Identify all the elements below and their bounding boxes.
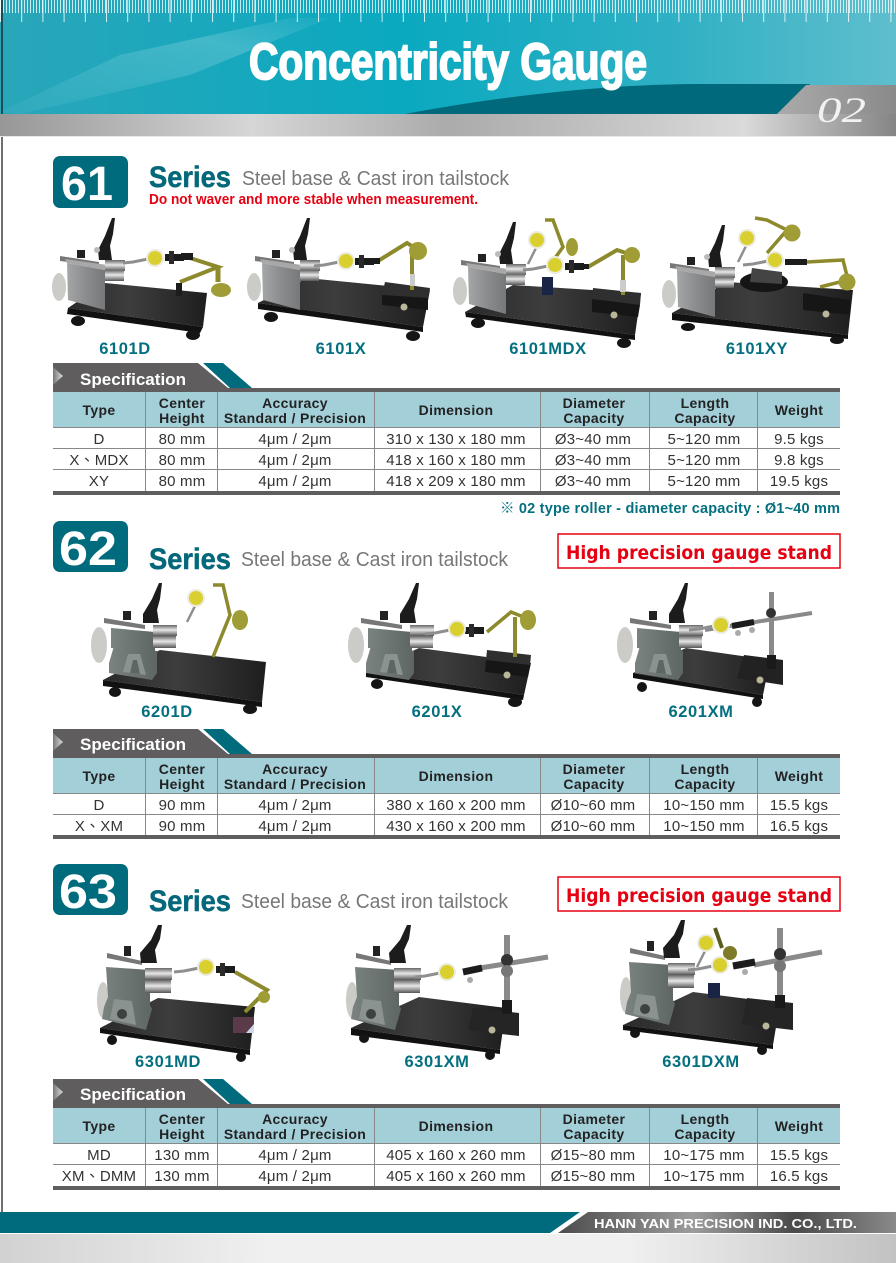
spec table: series 63: 405 x 160 x 260 mm — [386, 1168, 526, 1185]
panel: series 63 — [53, 864, 840, 1190]
spec table: series 61: 19.5 kgs — [770, 473, 828, 490]
series 63 badge: 63 — [59, 866, 117, 919]
spec table: series 62 — [53, 754, 840, 839]
product: 6101X — [247, 218, 430, 341]
spec table: series 63: 16.5 kgs — [770, 1168, 828, 1185]
spec table: series 63: Capacity — [563, 1126, 625, 1142]
product label: 6101D: 6101D — [99, 340, 151, 358]
series 62 badge: 62 — [59, 523, 117, 576]
spec table: series 61: 80 mm — [159, 473, 205, 490]
company name: HANN YAN PRECISION IND. CO., LTD. — [594, 1217, 857, 1231]
series 61 heading: Series — [149, 161, 231, 194]
spec table: series 63: 130 mm — [154, 1168, 210, 1185]
spec table: series 62: Center — [159, 761, 205, 777]
spec table: series 62: Weight — [775, 768, 823, 784]
spec table: series 62: 15.5 kgs — [770, 797, 828, 814]
spec table: series 62: 10~150 mm — [663, 797, 745, 814]
spec table: series 63: Diameter — [563, 1111, 626, 1127]
spec table: series 62: Type — [82, 768, 116, 784]
panel: series 61 — [52, 156, 856, 517]
spec table: series 61: Height — [159, 410, 205, 426]
spec table: series 61: 310 x 130 x 180 mm — [386, 431, 526, 448]
spec table: series 61: Standard / Precision — [224, 410, 366, 426]
product label: 6101X: 6101X — [316, 340, 366, 358]
spec table: series 61: D — [93, 431, 105, 448]
callout: high precision stand — [558, 877, 840, 911]
spec table: series 62: 4μm / 2μm — [258, 818, 332, 835]
product: 6101XY — [662, 218, 856, 344]
series 62 subtitle: Steel base & Cast iron tailstock — [241, 549, 509, 571]
spec table: series 61 — [53, 388, 840, 495]
page header band — [0, 0, 896, 137]
spec table: series 61: Center — [159, 395, 205, 411]
spec table: series 62: Ø10~60 mm — [551, 797, 635, 814]
spec table: series 61: 4μm / 2μm — [258, 452, 332, 469]
page number: 02 — [817, 90, 866, 130]
product: 6301XM — [346, 925, 548, 1060]
spec table: series 63: Weight — [775, 1118, 823, 1134]
spec table: series 63: Ø15~80 mm — [551, 1147, 635, 1164]
spec table: series 63: Dimension — [419, 1118, 493, 1134]
spec table: series 61: 5~120 mm — [668, 452, 740, 469]
spec table: series 61: Accuracy — [262, 395, 328, 411]
spec table: series 61: 9.8 kgs — [774, 452, 824, 469]
spec table: series 62: D — [93, 797, 105, 814]
spec table: series 61: XY — [89, 473, 109, 490]
spec table: series 63: Standard / Precision — [224, 1126, 366, 1142]
callout: high precision stand — [558, 534, 840, 568]
series 63 heading: Series — [149, 885, 231, 918]
series 62 badge — [53, 521, 128, 576]
spec table: series 63: 10~175 mm — [663, 1147, 745, 1164]
spec tab: series 61: Specification — [80, 370, 186, 389]
spec table: series 62: 90 mm — [159, 818, 205, 835]
spec table: series 61: Ø3~40 mm — [555, 452, 631, 469]
product label: 6301XM: 6301XM — [404, 1053, 470, 1071]
series 61 subtitle: Steel base & Cast iron tailstock — [242, 168, 510, 190]
spec table: series 61: 80 mm — [159, 452, 205, 469]
spec table: series 62: 90 mm — [159, 797, 205, 814]
spec tab: series 62: Specification — [80, 735, 186, 754]
spec table: series 62: Standard / Precision — [224, 776, 366, 792]
spec table: series 62: Length — [681, 761, 729, 777]
product: 6201D — [91, 583, 266, 714]
title: Concentricity Gauge — [249, 33, 647, 90]
spec table: series 63: XM、DMM — [62, 1168, 136, 1185]
series 61 badge — [53, 156, 128, 211]
spec table: series 62: Capacity — [563, 776, 625, 792]
table footnote: ※ 02 type roller - diameter capacity : Ø1~40 mm — [500, 501, 840, 517]
spec table: series 61: Ø3~40 mm — [555, 473, 631, 490]
spec table: series 62: Diameter — [563, 761, 626, 777]
spec table: series 63 — [53, 1104, 840, 1190]
spec tab: series 61 — [53, 363, 252, 389]
spec table: series 61: X、MDX — [69, 452, 129, 469]
product: 6301MD — [97, 925, 270, 1062]
series 63 badge — [53, 864, 128, 919]
spec table: series 61: 4μm / 2μm — [258, 431, 332, 448]
spec table: series 61: Capacity — [674, 410, 736, 426]
spec table: series 63: Capacity — [674, 1126, 736, 1142]
spec table: series 61: 9.5 kgs — [774, 431, 824, 448]
callout: high precision stand: High precision gauge stand — [566, 885, 832, 907]
spec table: series 62: 380 x 160 x 200 mm — [386, 797, 526, 814]
spec table: series 63: Center — [159, 1111, 205, 1127]
spec table: series 63: Height — [159, 1126, 205, 1142]
spec table: series 62: 430 x 160 x 200 mm — [386, 818, 526, 835]
series 61 note: Do not waver and more stable when measurement. — [149, 192, 478, 208]
spec table: series 61: Length — [681, 395, 729, 411]
spec table: series 61: Ø3~40 mm — [555, 431, 631, 448]
spec tab: series 63 — [53, 1079, 252, 1104]
spec table: series 62: Accuracy — [262, 761, 328, 777]
spec table: series 61: 418 x 160 x 180 mm — [386, 452, 526, 469]
spec table: series 61: Diameter — [563, 395, 626, 411]
footer — [0, 1212, 896, 1263]
spec table: series 61: Dimension — [419, 402, 493, 418]
spec table: series 63: 4μm / 2μm — [258, 1168, 332, 1185]
spec table: series 61: Type — [82, 402, 116, 418]
panel: series 62 — [53, 521, 840, 839]
spec table: series 62: 10~150 mm — [663, 818, 745, 835]
product: 6201X — [348, 583, 536, 707]
spec table: series 62: Height — [159, 776, 205, 792]
product: 6301DXM — [620, 920, 822, 1055]
spec table: series 63: 15.5 kgs — [770, 1147, 828, 1164]
spec table: series 61: 5~120 mm — [668, 431, 740, 448]
spec table: series 63: 4μm / 2μm — [258, 1147, 332, 1164]
spec table: series 61: Capacity — [563, 410, 625, 426]
spec table: series 61: 5~120 mm — [668, 473, 740, 490]
spec table: series 63: 405 x 160 x 260 mm — [386, 1147, 526, 1164]
spec tab: series 63: Specification — [80, 1085, 186, 1104]
product label: 6201D: 6201D — [141, 703, 193, 721]
series 61 badge: 61 — [61, 158, 113, 211]
product label: 6201XM: 6201XM — [668, 703, 734, 721]
product label: 6301DXM: 6301DXM — [662, 1053, 740, 1071]
spec table: series 63: Ø15~80 mm — [551, 1168, 635, 1185]
product label: 6201X: 6201X — [412, 703, 462, 721]
spec table: series 61: Weight — [775, 402, 823, 418]
series 63 subtitle: Steel base & Cast iron tailstock — [241, 891, 509, 913]
product: 6101D — [52, 218, 231, 340]
product label: 6101XY: 6101XY — [726, 340, 788, 358]
spec table: series 62: Ø10~60 mm — [551, 818, 635, 835]
series 62 heading: Series — [149, 543, 231, 576]
spec table: series 63: 10~175 mm — [663, 1168, 745, 1185]
spec table: series 62: 16.5 kgs — [770, 818, 828, 835]
spec table: series 61: 418 x 209 x 180 mm — [386, 473, 526, 490]
spec table: series 63: Accuracy — [262, 1111, 328, 1127]
spec table: series 61: 80 mm — [159, 431, 205, 448]
product: 6201XM — [617, 583, 812, 707]
spec table: series 63: Type — [82, 1118, 116, 1134]
spec table: series 62: Capacity — [674, 776, 736, 792]
product: 6101MDX — [453, 220, 641, 348]
spec table: series 62: Dimension — [419, 768, 493, 784]
product label: 6301MD: 6301MD — [135, 1053, 201, 1071]
spec table: series 61: 4μm / 2μm — [258, 473, 332, 490]
spec table: series 63: Length — [681, 1111, 729, 1127]
spec table: series 63: 130 mm — [154, 1147, 210, 1164]
spec table: series 62: X、XM — [75, 818, 123, 835]
spec table: series 63: MD — [87, 1147, 111, 1164]
spec tab: series 62 — [53, 729, 252, 754]
callout: high precision stand: High precision gauge stand — [566, 542, 832, 564]
spec table: series 62: 4μm / 2μm — [258, 797, 332, 814]
product label: 6101MDX: 6101MDX — [509, 340, 587, 358]
